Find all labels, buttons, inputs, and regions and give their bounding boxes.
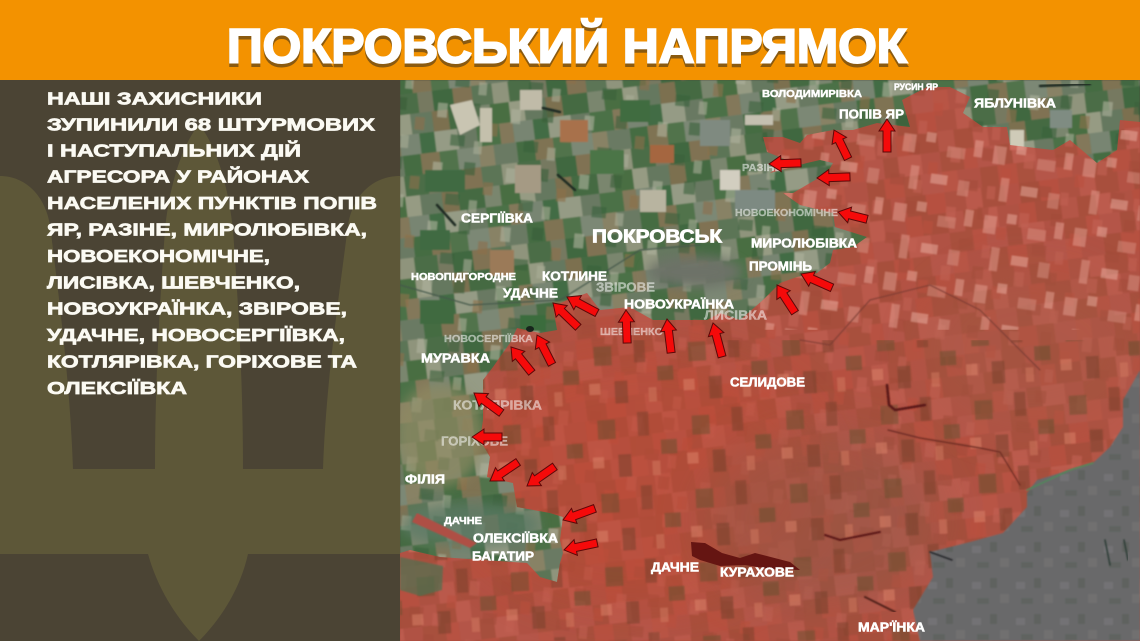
labels: settlements: КОТЛИНЕ bbox=[542, 270, 607, 284]
Kurakhove reservoir bbox=[691, 542, 800, 570]
icon: trident watermark bbox=[0, 125, 400, 641]
text block: summary: ЛИСІВКА, ШЕВЧЕНКО, bbox=[47, 272, 300, 292]
header band bbox=[0, 0, 1140, 80]
label: Покровськ: ПОКРОВСЬК bbox=[592, 226, 723, 246]
labels: settlements: ПРОМІНЬ bbox=[749, 260, 812, 274]
text block: summary: ОЛЕКСІЇВКА bbox=[47, 378, 187, 398]
title: ПОКРОВСЬКИЙ НАПРЯМОК bbox=[227, 22, 908, 77]
text block: summary: ЯР, РАЗІНЕ, МИРОЛЮБІВКА, bbox=[47, 220, 367, 240]
attack arrows bbox=[469, 119, 895, 558]
text block: summary: НОВОУКРАЇНКА, ЗВІРОВЕ, bbox=[47, 298, 347, 318]
south-west tan farmland bbox=[396, 383, 484, 487]
Pokrovsk urban area bbox=[647, 256, 743, 288]
labels: settlements: КУРАХОВЕ bbox=[720, 566, 794, 580]
occupied territory overlay bbox=[400, 80, 1140, 641]
labels: contested settlements: ШЕВЧЕНКО bbox=[600, 326, 663, 338]
text block: summary: АГРЕСОРА У РАЙОНАХ bbox=[47, 166, 309, 186]
labels: settlements: МАР'ЇНКА bbox=[858, 620, 925, 634]
labels: contested settlements: ЛИСІВКА bbox=[704, 308, 767, 322]
labels: contested settlements: КОТЛЯРІВКА bbox=[453, 398, 542, 412]
labels: settlements: ОЛЕКСІЇВКА bbox=[473, 530, 558, 546]
labels: settlements: СЕЛИДОВЕ bbox=[730, 376, 805, 390]
uncontrolled urban area bbox=[913, 370, 1140, 641]
labels: contested settlements: НОВОСЕРГІЇВКА bbox=[444, 332, 533, 345]
labels: contested settlements: НОВОЕКОНОМІЧНЕ bbox=[735, 207, 838, 219]
city labels bbox=[405, 82, 1056, 634]
left panel with trident emblem bbox=[0, 80, 400, 641]
irregular large fields bbox=[420, 90, 1072, 331]
labels: small settlements: ДАЧНЕ bbox=[444, 515, 482, 527]
green pockets inside occupied area bbox=[400, 513, 477, 596]
text block: summary: УДАЧНЕ, НОВОСЕРГІЇВКА, bbox=[47, 325, 345, 345]
labels: contested settlements bbox=[441, 162, 838, 448]
map panel bbox=[396, 80, 1140, 641]
labels: settlements: МИРОЛЮБІВКА bbox=[751, 236, 857, 250]
labels: contested settlements: РАЗІНЕ bbox=[742, 162, 782, 174]
labels: small settlements: ВОЛОДИМИРІВКА bbox=[762, 88, 862, 100]
text block: summary: ЗУПИНИЛИ 68 ШТУРМОВИХ bbox=[47, 114, 375, 134]
labels: contested settlements: ГОРІХОВЕ bbox=[441, 434, 508, 448]
text block: summary bbox=[47, 88, 377, 398]
labels: contested settlements: ЗВІРОВЕ bbox=[596, 280, 655, 294]
frontline fringe and rivers bbox=[400, 84, 1128, 612]
labels: settlements: УДАЧНЕ bbox=[503, 286, 558, 300]
labels: settlements: ФІЛІЯ bbox=[405, 472, 445, 486]
text block: summary: КОТЛЯРІВКА, ГОРІХОВЕ ТА bbox=[47, 352, 357, 372]
text block: summary: НОВОЕКОНОМІЧНЕ, bbox=[47, 246, 270, 266]
text block: summary: НАШІ ЗАХИСНИКИ bbox=[47, 88, 262, 108]
labels: settlements: НОВОУКРАЇНКА bbox=[624, 296, 734, 312]
labels: settlements: ПОПІВ ЯР bbox=[839, 108, 904, 122]
labels: small settlements: РУСИН ЯР bbox=[894, 82, 938, 92]
labels: settlements: БАГАТИР bbox=[472, 550, 534, 564]
south-west wooded strip bbox=[400, 503, 540, 547]
labels: small settlements bbox=[411, 82, 938, 527]
satellite base fields bbox=[400, 80, 1140, 641]
labels: settlements: ЯБЛУНІВКА bbox=[974, 96, 1056, 110]
labels: settlements: СЕРГІЇВКА bbox=[461, 210, 533, 226]
labels: settlements: МУРАВКА bbox=[421, 352, 490, 366]
labels: small settlements: НОВОПІДГОРОДНЕ bbox=[411, 271, 516, 283]
pond near Novoserhiivka bbox=[526, 326, 534, 332]
text block: summary: НАСЕЛЕНИХ ПУНКТІВ ПОПІВ bbox=[47, 193, 377, 213]
text block: summary: І НАСТУПАЛЬНИХ ДІЙ bbox=[47, 140, 301, 160]
labels: settlements bbox=[405, 96, 1056, 634]
title: ПОКРОВСЬКИЙ НАПРЯМОК bbox=[227, 18, 908, 74]
labels: settlements: ДАЧНЕ bbox=[651, 560, 699, 574]
